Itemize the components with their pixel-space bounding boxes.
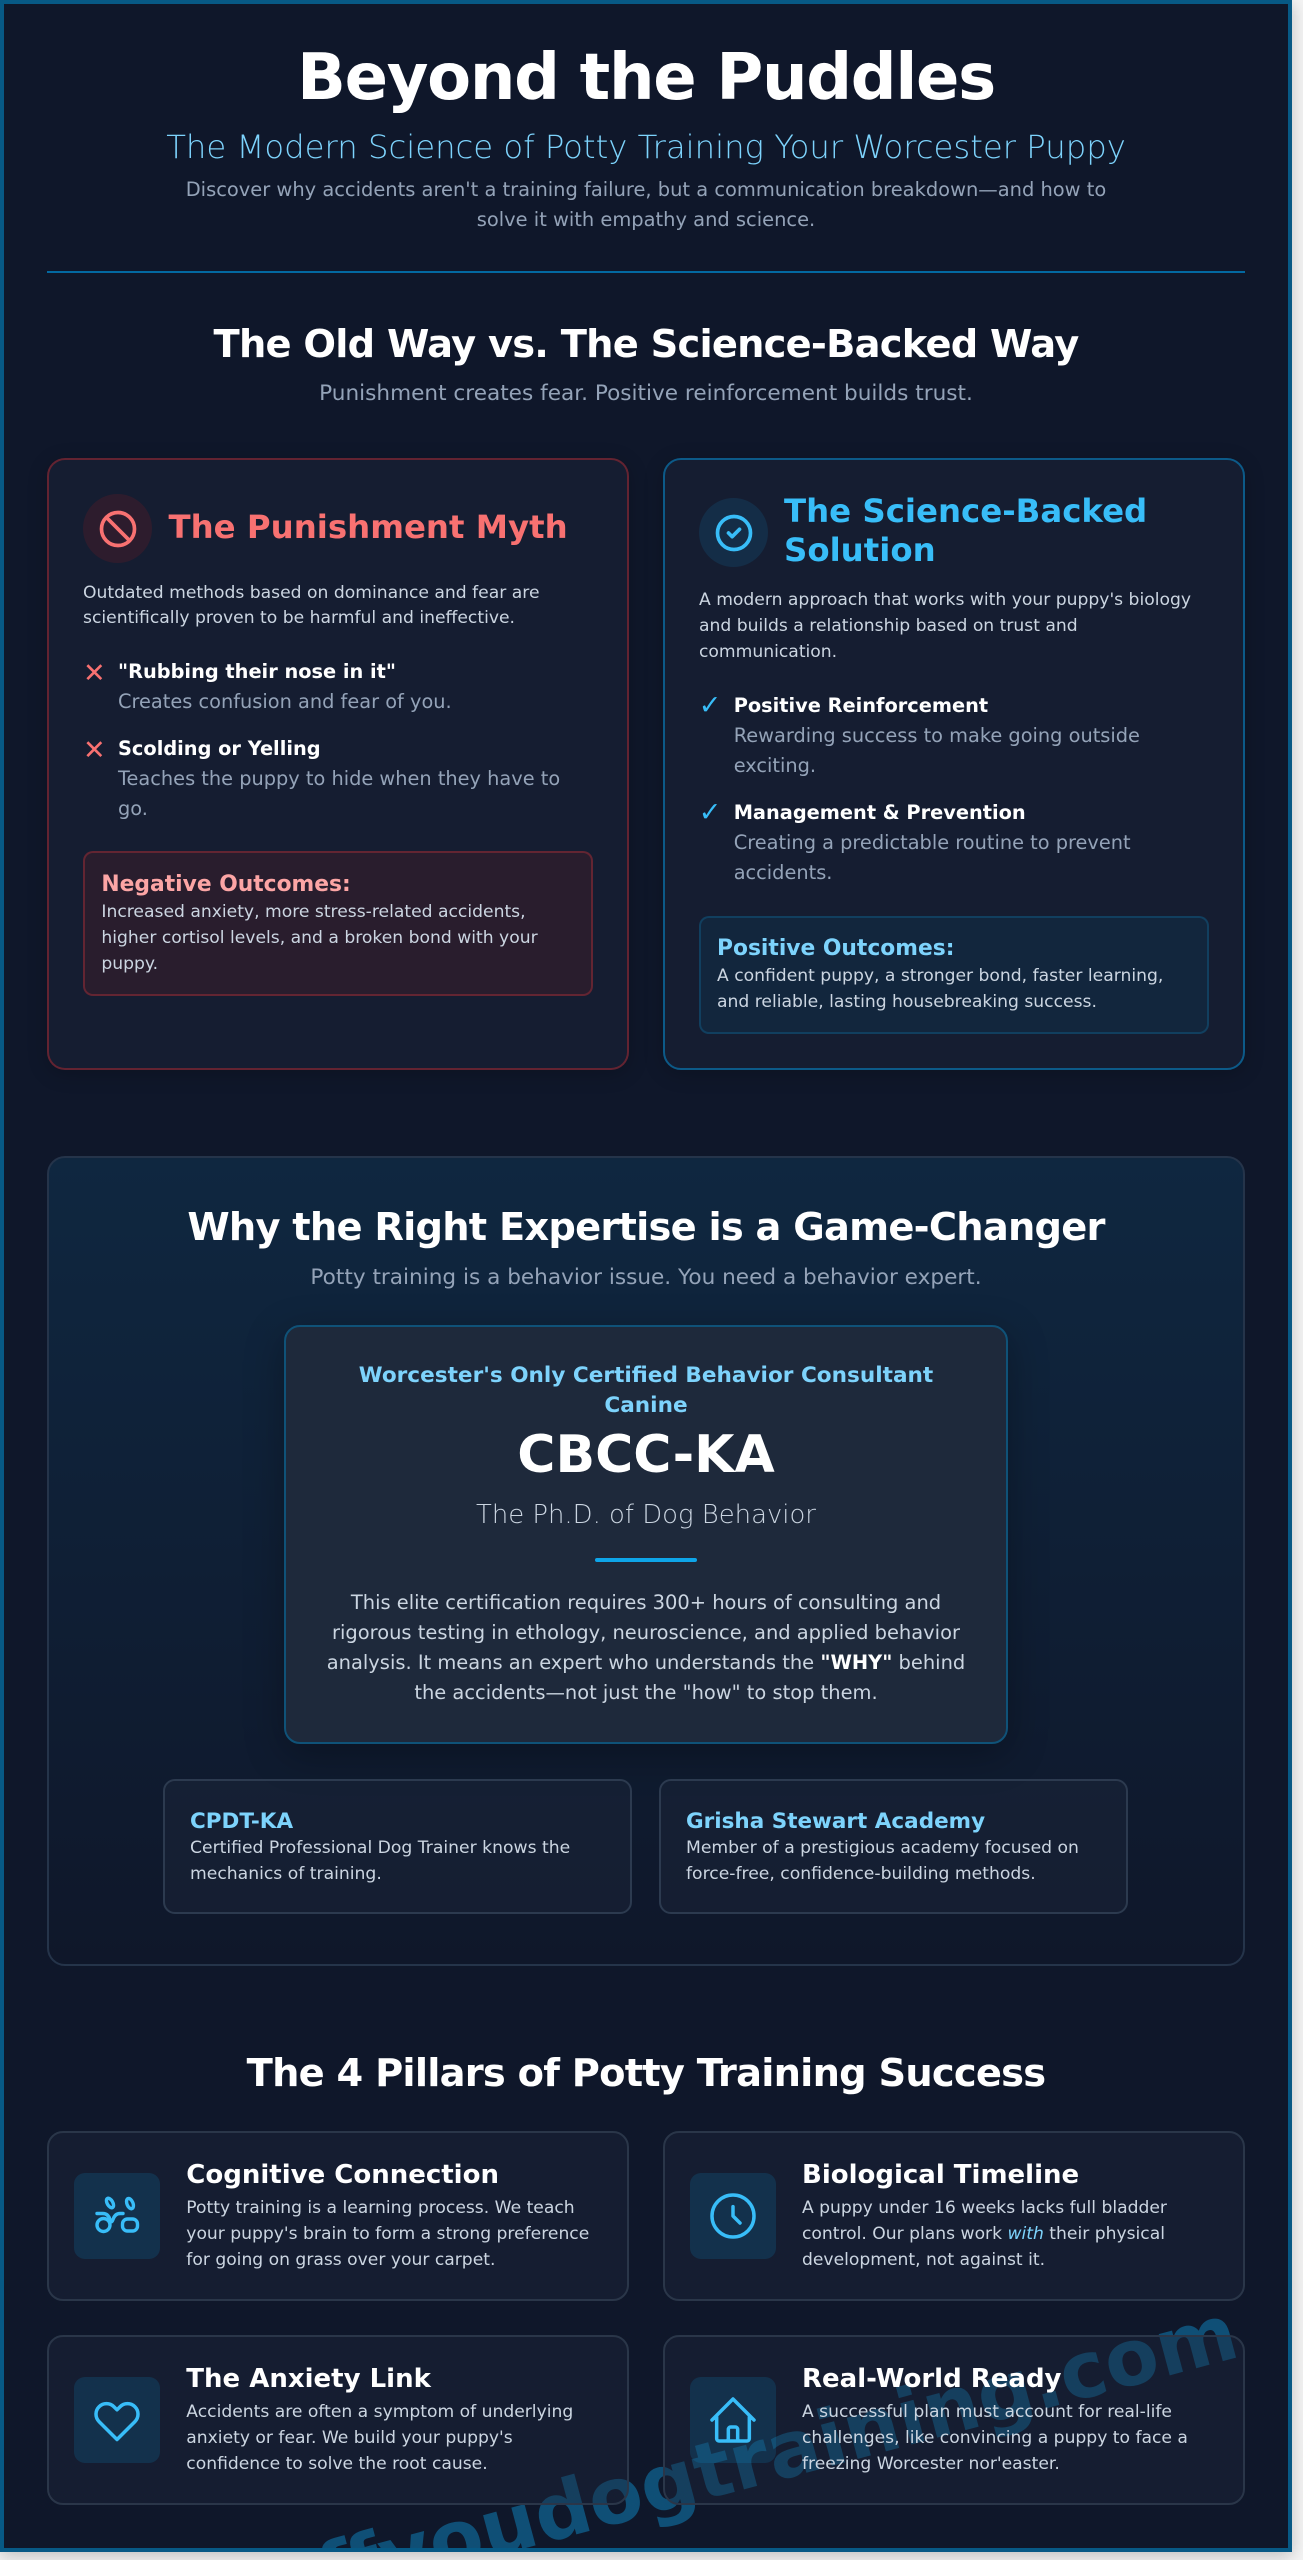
negative outcomes text (101, 902, 538, 974)
icon: check circle (699, 498, 768, 567)
real-world title: Real-World Ready (802, 2364, 1062, 2394)
negative outcomes text: puppy. (101, 954, 158, 974)
list item: scolding: Scolding or Yelling (118, 737, 321, 760)
list item: scolding: Teaches the puppy to hide when they have to (118, 767, 560, 790)
heading: four pillars: The 4 Pillars of Potty Training Success (247, 2051, 1045, 2096)
punishment heading: The Punishment Myth (168, 508, 568, 546)
panel: science-backed solution (663, 458, 1245, 1070)
credential description (327, 1591, 965, 1704)
icon: ban (83, 494, 152, 563)
CPDT-KA text: Certified Professional Dog Trainer knows the (190, 1838, 570, 1858)
panel: punishment myth: ✕ (83, 658, 106, 689)
list item: management: Management & Prevention (734, 801, 1026, 824)
accent bar (595, 1558, 697, 1562)
real-world text: challenges, like convincing a puppy to face a (802, 2428, 1188, 2448)
credential card: CBCC-KA (284, 1325, 1008, 1744)
intro text: Discover why accidents aren't a training failure, but a communication breakdown—and how to (186, 178, 1106, 201)
expertise heading: Why the Right Expertise is a Game-Changer (187, 1205, 1105, 1250)
panel: science-backed solution: ✓ (699, 797, 721, 828)
section subheading: Punishment creates fear. Positive reinforcement builds trust. (319, 381, 973, 406)
solution intro: communication. (699, 642, 837, 662)
list item: management (699, 797, 1131, 884)
solution heading: Solution (784, 531, 936, 569)
Grisha text: Member of a prestigious academy focused on (686, 1838, 1079, 1858)
biological title: Biological Timeline (802, 2160, 1079, 2190)
list item: rubbing nose: Creates confusion and fear of you. (118, 690, 452, 713)
list item: scolding: go. (118, 797, 148, 820)
callout: positive outcomes (699, 916, 1209, 1034)
icon: paw connection (74, 2173, 160, 2259)
heading: old way vs science: The Old Way vs. The Science-Backed Way (214, 322, 1078, 367)
Grisha text: force-free, confidence-building methods. (686, 1864, 1036, 1884)
pillar: cognitive connection (47, 2130, 629, 2300)
credential label: Worcester's Only Certified Behavior Consultant (359, 1363, 933, 1388)
intro text (186, 178, 1106, 231)
pillar: real-world ready (663, 2334, 1245, 2504)
panel: punishment myth: ✕ (83, 735, 106, 766)
credential name: CBCC-KA (517, 1425, 775, 1485)
list item: rubbing nose: "Rubbing their nose in it" (118, 660, 396, 683)
Grisha title: Grisha Stewart Academy (686, 1809, 985, 1834)
credential description: the accidents—not just the "how" to stop them. (414, 1681, 878, 1704)
list item: rubbing nose (83, 658, 452, 713)
credential description: This elite certification requires 300+ hours of consulting and (351, 1591, 941, 1614)
panel: right expertise (47, 1156, 1245, 1966)
credential description: analysis. It means an expert who understands the "WHY" behind (327, 1651, 965, 1674)
credential card: CPDT-KA (163, 1779, 632, 1914)
icon: home (690, 2377, 776, 2463)
CPDT-KA title: CPDT-KA (190, 1809, 293, 1834)
biological text: control. Our plans work with their physical (802, 2224, 1165, 2244)
solution heading (784, 492, 1147, 569)
positive outcomes text (717, 966, 1163, 1012)
panel: punishment myth (47, 458, 629, 1070)
credential tagline: The Ph.D. of Dog Behavior (476, 1500, 816, 1530)
header divider (47, 271, 1245, 273)
punishment intro (83, 583, 540, 628)
anxiety text: anxiety or fear. We build your puppy's (186, 2428, 513, 2448)
biological text (802, 2198, 1167, 2270)
CPDT-KA text (190, 1838, 570, 1884)
negative outcomes heading: Negative Outcomes: (101, 872, 351, 897)
solution intro (699, 590, 1191, 662)
biological text: development, not against it. (802, 2250, 1045, 2270)
subtitle: The Modern Science of Potty Training Your Worcester Puppy (166, 128, 1126, 166)
cognitive text: your puppy's brain to form a strong preference (186, 2224, 589, 2244)
CPDT-KA text: mechanics of training. (190, 1864, 382, 1884)
credential description: rigorous testing in ethology, neuroscience, and applied behavior (332, 1621, 960, 1644)
list item: positive reinforcement (699, 690, 1140, 777)
real-world text (802, 2402, 1188, 2474)
list item: positive reinforcement: Positive Reinforcement (734, 694, 988, 717)
title: Beyond the Puddles (297, 41, 995, 115)
solution heading: The Science-Backed (784, 492, 1147, 530)
callout: negative outcomes (83, 851, 593, 996)
solution intro: and builds a relationship based on trust and (699, 616, 1078, 636)
negative outcomes text: higher cortisol levels, and a broken bond with your (101, 928, 538, 948)
intro text: solve it with empathy and science. (477, 208, 815, 231)
cognitive text: for going on grass over your carpet. (186, 2250, 495, 2270)
pillar: biological timeline (663, 2130, 1245, 2300)
list item: management: Creating a predictable routine to prevent (734, 831, 1131, 854)
real-world text: A successful plan must account for real-life (802, 2402, 1172, 2422)
anxiety text (186, 2402, 573, 2474)
cognitive title: Cognitive Connection (186, 2160, 499, 2190)
anxiety text: confidence to solve the root cause. (186, 2454, 488, 2474)
positive outcomes text: and reliable, lasting housebreaking success. (717, 992, 1097, 1012)
cognitive text: Potty training is a learning process. We teach (186, 2198, 575, 2218)
credential label: Canine (604, 1393, 688, 1418)
Grisha text (686, 1838, 1079, 1884)
list item: positive reinforcement: Rewarding success to make going outside (734, 724, 1140, 747)
cognitive text (186, 2198, 589, 2270)
panel: science-backed solution: ✓ (699, 690, 721, 721)
real-world text: freezing Worcester nor'easter. (802, 2454, 1060, 2474)
anxiety title: The Anxiety Link (186, 2364, 431, 2394)
icon: heart (74, 2377, 160, 2463)
list item: scolding (83, 735, 560, 820)
punishment intro: Outdated methods based on dominance and fear are (83, 583, 540, 603)
credential label (359, 1363, 933, 1418)
icon: clock (690, 2173, 776, 2259)
credential card: Grisha Stewart Academy (658, 1779, 1128, 1914)
list item: management: accidents. (734, 861, 832, 884)
pillar: anxiety link (47, 2334, 629, 2504)
negative outcomes text: Increased anxiety, more stress-related accidents, (101, 902, 526, 922)
positive outcomes heading: Positive Outcomes: (717, 936, 954, 961)
solution intro: A modern approach that works with your puppy's biology (699, 590, 1191, 610)
biological text: A puppy under 16 weeks lacks full bladder (802, 2198, 1167, 2218)
anxiety text: Accidents are often a symptom of underlying (186, 2402, 573, 2422)
punishment intro: scientifically proven to be harmful and ineffective. (83, 608, 515, 628)
expertise subheading: Potty training is a behavior issue. You need a behavior expert. (310, 1264, 982, 1290)
list item: positive reinforcement: exciting. (734, 754, 816, 777)
positive outcomes text: A confident puppy, a stronger bond, faster learning, (717, 966, 1163, 986)
